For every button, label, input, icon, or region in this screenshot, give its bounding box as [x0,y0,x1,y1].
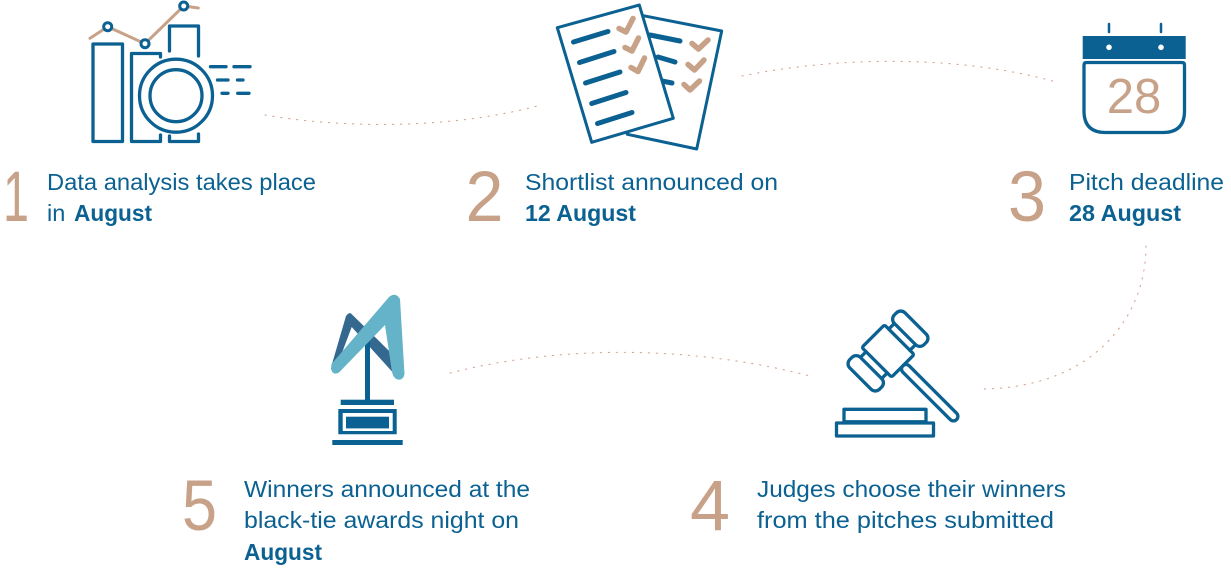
step 5 description line 2: black-tie awards night on [244,507,519,533]
step 5 description line 1: Winners announced at the [244,476,530,502]
text block: step 5 [182,467,530,565]
step 1 description: Data analysis takes place [47,169,316,195]
step 5 date: August [244,539,322,565]
number 4: 4 [690,467,730,546]
step 2 description: Shortlist announced on [525,169,778,195]
number 3: 3 [1008,158,1046,237]
text block: step 2 [466,158,778,237]
icon: trophy [331,295,404,445]
text block: step 1 [3,158,316,237]
icon: calendar [1083,24,1186,132]
number 5: 5 [182,467,217,546]
arrow: dotted connector step 3 to 4 [982,246,1146,389]
arrow: dotted connector step 4 to 5 [450,352,810,376]
step 3 date: 28 August [1069,200,1181,226]
arrow: dotted connector step 2 to 3 [742,61,1056,82]
number 2: 2 [466,158,504,237]
text block: step 4 [690,467,1066,546]
arrow: dotted connector step 1 to 2 [265,105,541,124]
text block: step 3 [1008,158,1224,237]
step 4 description line 2: from the pitches submitted [757,507,1054,533]
step 3 description: Pitch deadline [1069,169,1224,195]
step 1 date: in [47,200,72,226]
number 1: 1 [3,158,29,237]
icon: bar chart with magnifying glass [90,2,250,142]
step 2 date: 12 August [525,200,636,226]
icon: checklist documents [557,5,722,149]
icon: gavel [836,309,984,447]
icon: calendar: 28 [1107,70,1161,124]
step 4 description line 1: Judges choose their winners [757,476,1066,502]
step 1 date: August [74,200,152,226]
